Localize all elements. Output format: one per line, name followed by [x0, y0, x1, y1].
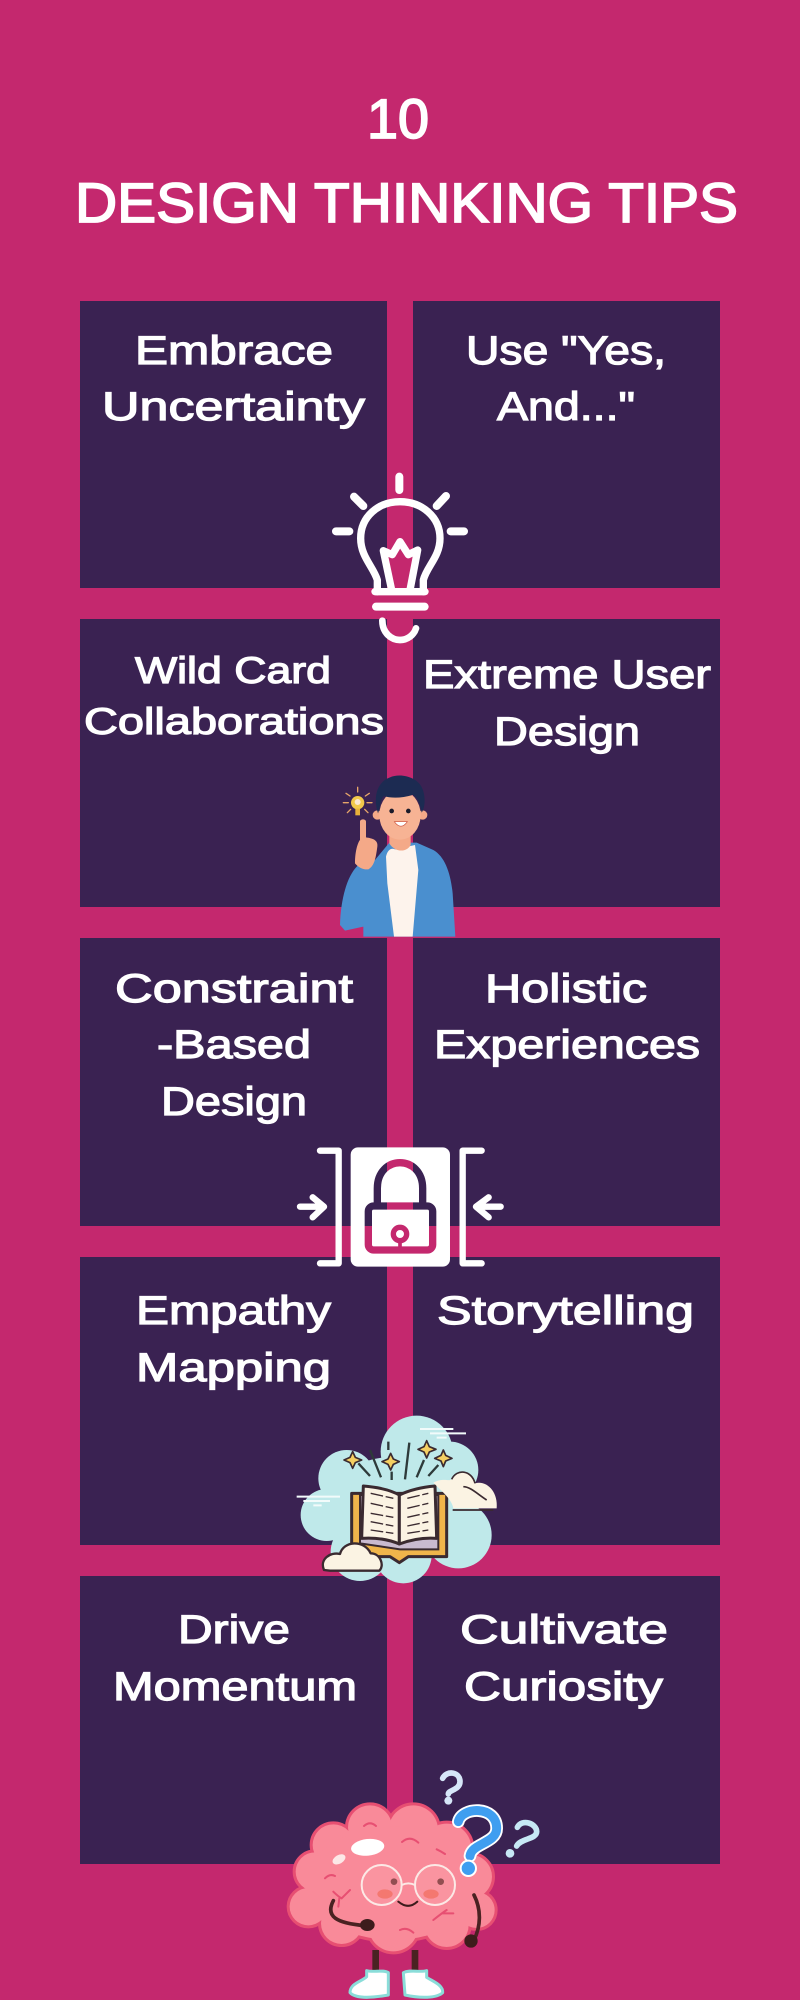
icon: brain character with question marks	[290, 1773, 537, 1997]
panel: Constraint-Based Design: Constraint	[115, 967, 353, 1011]
panel: Holistic Experiences	[413, 938, 720, 1226]
panel: Constraint-Based Design: -Based	[157, 1023, 311, 1067]
panel: Cultivate Curiosity: Curiosity	[464, 1665, 663, 1709]
panel: Use "Yes, And...": Use "Yes,	[466, 329, 666, 373]
panel: Extreme User Design: Extreme User	[423, 653, 711, 697]
panel: Constraint-Based Design: Design	[161, 1080, 307, 1124]
panel: Extreme User Design	[413, 619, 720, 907]
title	[75, 87, 738, 234]
panel: Embrace Uncertainty: Uncertainty	[102, 385, 365, 429]
panel: Cultivate Curiosity	[413, 1576, 720, 1864]
panel: Wild Card Collaborations	[80, 619, 387, 907]
panel: Drive Momentum	[80, 1576, 387, 1864]
icon: open book on cloud	[297, 1416, 497, 1583]
panel: Holistic Experiences: Experiences	[434, 1023, 700, 1067]
panel: Use "Yes, And...": And..."	[497, 385, 635, 429]
panel: Empathy Mapping	[80, 1257, 387, 1545]
panel: Empathy Mapping: Mapping	[136, 1346, 331, 1390]
icon: padlock between brackets with arrows	[300, 1147, 501, 1267]
panel: Embrace Uncertainty: Embrace	[135, 329, 333, 373]
panel: Empathy Mapping: Empathy	[136, 1289, 331, 1333]
panel: Embrace Uncertainty	[80, 301, 387, 588]
panel: Extreme User Design: Design	[494, 710, 640, 754]
panel: Wild Card Collaborations: Collaborations	[84, 701, 384, 742]
panel: Storytelling	[413, 1257, 720, 1545]
panel: Drive Momentum: Drive	[178, 1608, 290, 1652]
panel: Storytelling: Storytelling	[437, 1289, 694, 1333]
icon: light bulb	[336, 477, 464, 640]
panel: Drive Momentum: Momentum	[113, 1665, 357, 1709]
panel: Holistic Experiences: Holistic	[485, 967, 647, 1011]
title: 10	[367, 87, 429, 150]
panel: Cultivate Curiosity: Cultivate	[460, 1608, 668, 1652]
icon: man with raised finger and idea bulb	[340, 775, 455, 937]
panel: Use "Yes, And..."	[413, 301, 720, 588]
title: DESIGN THINKING TIPS	[75, 171, 738, 234]
panel: Wild Card Collaborations: Wild Card	[135, 650, 331, 691]
panel: Constraint-Based Design	[80, 938, 387, 1226]
